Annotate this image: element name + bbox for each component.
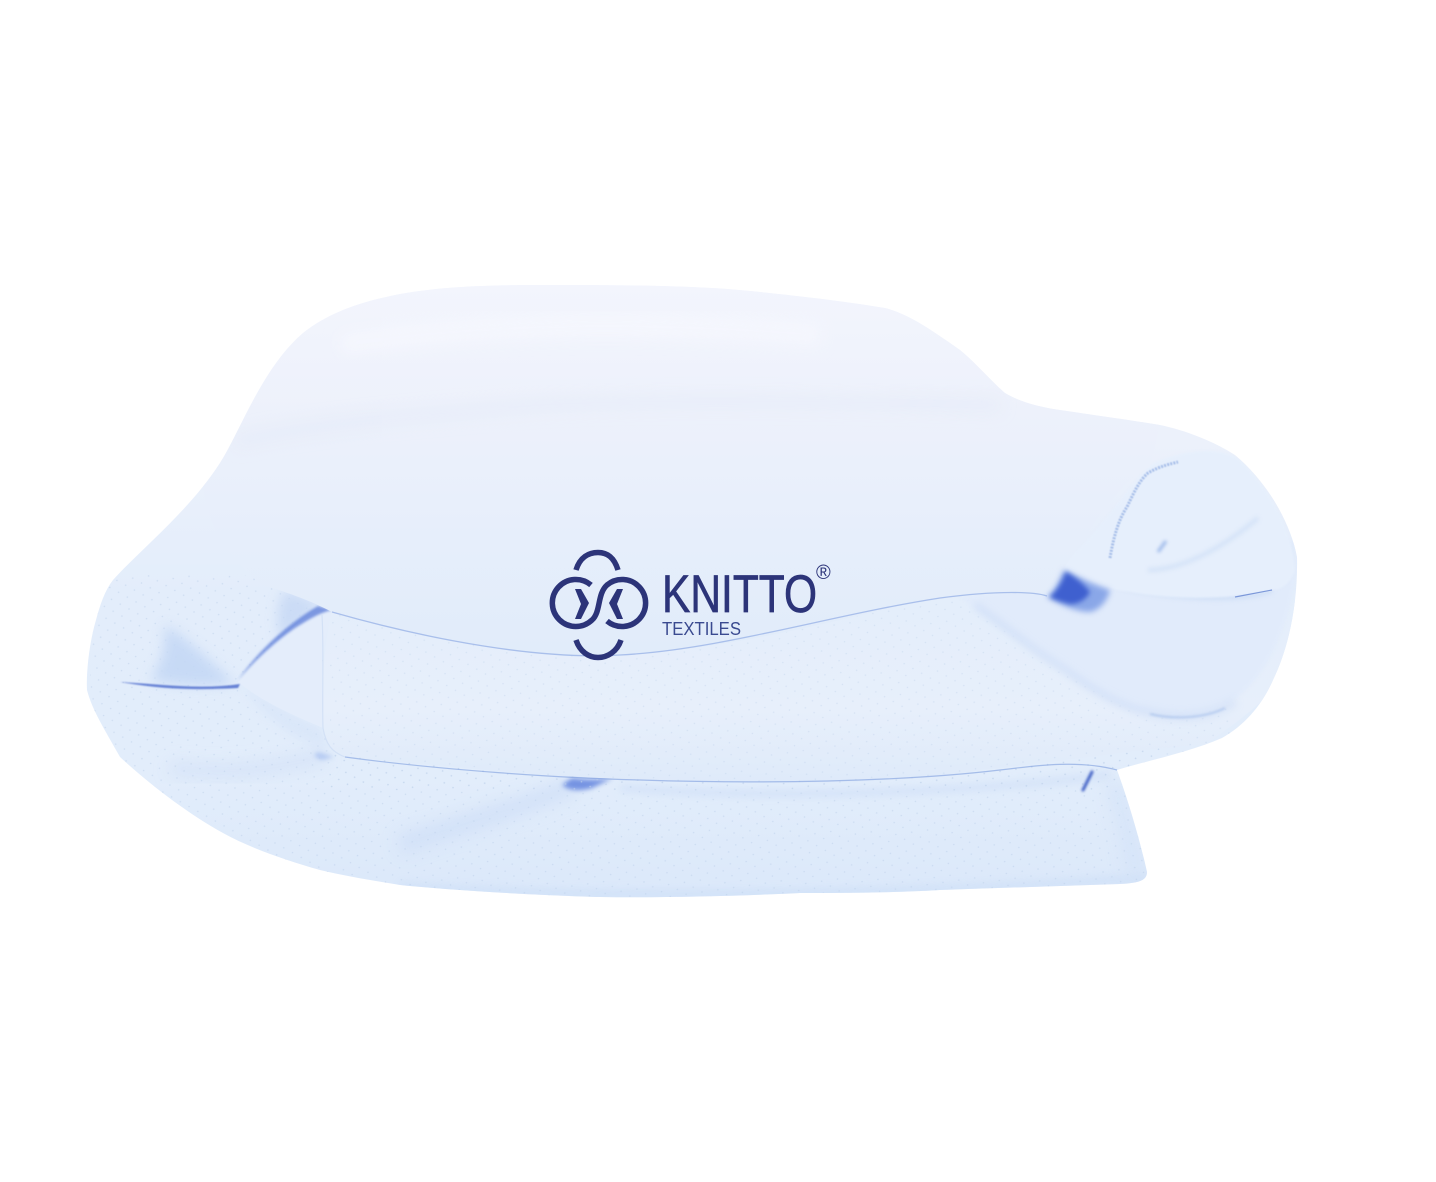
fabric base silhouette xyxy=(87,285,1297,897)
logo: Knitto Textiles xyxy=(552,552,831,658)
fabric roll xyxy=(87,285,1297,900)
left rolled fold xyxy=(120,590,334,760)
hem stitching xyxy=(1110,462,1178,558)
registered mark: ® xyxy=(816,562,831,584)
middle fold xyxy=(322,615,1230,786)
logo subtitle: TEXTILES xyxy=(662,619,741,639)
bottom layer shading xyxy=(90,575,1160,900)
dark crease: left fold xyxy=(120,682,240,689)
infographic: folded fabric product photo with logo xyxy=(86,285,1297,898)
upper fold xyxy=(262,575,1062,656)
tiny crease mark at lower right xyxy=(1083,772,1092,790)
right rolled edge xyxy=(968,517,1273,721)
deep crease at right xyxy=(1047,570,1110,612)
logo mark: interlocking rings xyxy=(552,552,646,658)
logo wordmark: KNITTO xyxy=(662,565,817,624)
